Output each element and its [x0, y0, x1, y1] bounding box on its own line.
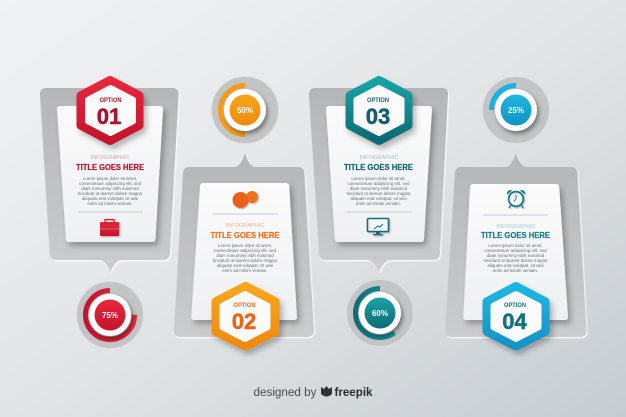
25% value: 25%: [508, 106, 524, 115]
panel 04 card: [463, 184, 568, 320]
panel 02 label: INFOGRAPHIC: [226, 223, 264, 229]
option 04 number: 04: [502, 309, 527, 334]
panel 01 backing with pointer: [40, 88, 179, 272]
hexagon: option 03: [350, 81, 408, 140]
icon: alarm clock: [507, 190, 525, 208]
panel 03 body text: consectetuer adipiscing elit, sed: [347, 181, 410, 186]
50% value: 50%: [237, 106, 253, 115]
60% value: 60%: [372, 309, 388, 318]
panel 02 body text: tincidunt ut laoreet dolore magna: [213, 258, 278, 263]
panel 01 body text: tincidunt ut laoreet dolore magna: [78, 191, 143, 196]
panel 03 backing with pointer: [309, 88, 448, 272]
footer credit: freepik: [334, 387, 373, 399]
gauge: 50%: [212, 76, 278, 144]
75% value: 75%: [102, 311, 118, 320]
panel 01 label: INFOGRAPHIC: [91, 155, 129, 161]
panel 03 body text: aliquam erat volutpat. Ut wisi: [350, 196, 407, 201]
option 01 label: OPTION: [100, 97, 122, 104]
panel 02 body text: Lorem ipsum dolor sit amet,: [218, 243, 272, 248]
panel 01 body text: aliquam erat volutpat. Ut wisi: [82, 196, 138, 201]
panel 01 body text: consectetuer adipiscing elit, sed: [79, 181, 142, 186]
panel 03 card: [326, 106, 432, 242]
option 03 number: 03: [366, 104, 390, 129]
panel 03 label: INFOGRAPHIC: [360, 155, 398, 161]
panel 04 backing with pointer: [445, 153, 587, 337]
panel 03 body text: tincidunt ut laoreet dolore magna: [347, 191, 411, 196]
panel: option 04: [445, 153, 587, 346]
icon: freepik crown: [321, 386, 332, 396]
panel 01 title: TITLE GOES HERE: [76, 162, 144, 172]
panel 03 body text: diam nonummy nibh euismod: [350, 186, 408, 191]
panel: option 02: [174, 153, 314, 346]
option 04 label: OPTION: [504, 302, 526, 309]
panel: option 01: [40, 81, 179, 272]
panel: option 03: [309, 81, 448, 272]
panel 02 body text: aliquam erat volutpat. Ut wisi: [217, 263, 273, 268]
hexagon: option 01: [82, 81, 138, 140]
panel 04 body text: aliquam erat volutpat. Ut wisi: [487, 263, 544, 268]
panel 03 body text: Lorem ipsum dolor sit amet,: [351, 176, 406, 181]
hexagon: option 02: [216, 287, 274, 346]
panel 04 body text: Lorem ipsum dolor sit amet,: [488, 243, 543, 248]
icon: briefcase: [100, 220, 119, 236]
panel 04 body text: diam nonummy nibh euismod: [487, 253, 545, 258]
panel 04 body text: enim ad minim veniam.: [493, 268, 538, 273]
option 01 number: 01: [97, 104, 121, 129]
option 02 label: OPTION: [234, 302, 256, 309]
panel 04 label: INFOGRAPHIC: [497, 224, 535, 230]
panel 01 body text: Lorem ipsum dolor sit amet,: [83, 176, 137, 181]
panel 03 title: TITLE GOES HERE: [344, 162, 413, 172]
panel 02 body text: consectetuer adipiscing elit, sed: [214, 248, 277, 253]
panel 03 body text: enim ad minim veniam.: [356, 201, 401, 206]
option 02 number: 02: [232, 309, 256, 334]
panel 02 title: TITLE GOES HERE: [210, 230, 280, 240]
icon: monitor: [368, 218, 388, 235]
option 03 label: OPTION: [367, 97, 389, 104]
icon: speech bubbles: [232, 191, 258, 208]
panel 02 card: [191, 183, 297, 320]
gauge: 25%: [482, 76, 550, 144]
panel 02 body text: enim ad minim veniam.: [222, 268, 268, 273]
footer credit: [254, 386, 373, 399]
footer credit: designed by: [254, 387, 317, 399]
gauge: 60%: [346, 280, 414, 346]
panel 02 backing with pointer: [174, 153, 314, 337]
gauge: 75%: [76, 282, 144, 348]
panel 01 body text: diam nonummy nibh euismod: [81, 186, 139, 191]
panel 04 title: TITLE GOES HERE: [481, 230, 550, 240]
panel 02 body text: diam nonummy nibh euismod: [216, 253, 274, 258]
panel 04 body text: consectetuer adipiscing elit, sed: [484, 248, 547, 253]
panel 01 body text: enim ad minim veniam.: [87, 201, 133, 206]
hexagon: option 04: [488, 287, 544, 346]
panel 04 body text: tincidunt ut laoreet dolore magna: [484, 258, 548, 263]
panel 01 card: [57, 106, 163, 242]
